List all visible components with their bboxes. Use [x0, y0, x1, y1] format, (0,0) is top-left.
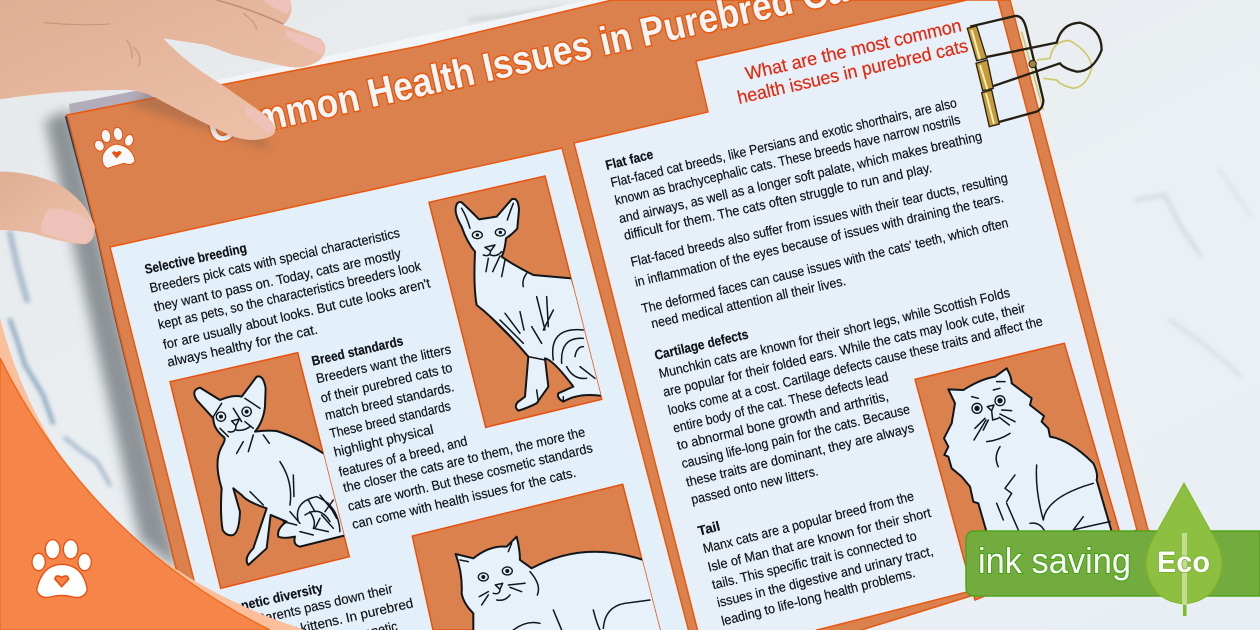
text block: breed standards: [310, 333, 594, 532]
image: hairless cat sitting with raised paw: [170, 353, 349, 588]
page edge: [66, 116, 178, 574]
text block: breed standards: features of a breed, and: [337, 433, 469, 480]
text block: selective breeding: they want to pass on. Today, cats are mostly: [152, 246, 403, 315]
text block: genetic diversity: Genetic diversity: [223, 580, 325, 617]
banner bar: [966, 531, 1260, 596]
icon: leaf: [1146, 483, 1222, 616]
text block: tail: Tail: [696, 518, 722, 539]
image: hairless cat in profile: [429, 176, 607, 427]
text block: tail: issues in the digestive and urinary tract,: [715, 543, 935, 610]
stacked paper edges: [69, 0, 625, 118]
subtitle question: What are the most common: [743, 14, 963, 84]
text block: breed standards: highlight physical: [332, 422, 435, 460]
icon: leaf: Eco: [1157, 546, 1210, 579]
page shadow: [45, 110, 180, 572]
binder clip: [967, 16, 1102, 127]
text block: flat face: [604, 95, 1010, 331]
text block: selective breeding: for are usually about looks. But cute looks aren't: [162, 276, 432, 352]
text block: flat face: difficult for them. The cats often struggle to run and play.: [622, 160, 933, 243]
text block: tail: [696, 488, 935, 629]
text block: breed standards: the closer the cats are to them, the more the: [342, 424, 587, 495]
text block: flat face: Flat-faced cat breeds, like Persians and exotic shorthairs, are also: [609, 95, 958, 190]
text block: breed standards: of their purebred cats to: [319, 360, 454, 406]
text block: breed standards: These breed standards: [328, 398, 452, 441]
text block: cartilage defects: these traits are dominant, they are always: [684, 420, 916, 490]
text block: selective breeding: always healthy for the cat.: [166, 322, 319, 370]
corner curve: [0, 358, 270, 630]
text block: cartilage defects: entire body of the cat. These defects lead: [671, 369, 890, 436]
text block: flat face: in inflammation of the eyes because of issues with draining the tears.: [633, 190, 1005, 290]
text block: breed standards: cats are worth. But these cosmetic standards: [346, 440, 594, 514]
subtitle question: health issues in purebred cats: [735, 35, 970, 108]
image: fluffy flat-faced cat: [915, 343, 1122, 600]
text block: flat face: known as brachycephalic cats. These breeds have narrow nostrils: [613, 112, 962, 208]
text block: selective breeding: Breeders pick cats with special characteristics: [148, 225, 401, 296]
text block: cartilage defects: are popular for their folded ears. While the cats may look cute, their: [662, 300, 1027, 400]
text block: cartilage defects: Munchkin cats are known for their short legs, while Scottish Folds: [657, 285, 1012, 381]
panel: right: [574, 0, 1137, 630]
text block: cartilage defects: looks come at a cost. Cartilage defects cause these traits and affect the: [666, 314, 1044, 418]
text block: flat face: need medical attention all their lives.: [650, 273, 847, 331]
hand: fingers: [0, 0, 325, 244]
text block: cartilage defects: [653, 285, 1044, 507]
text block: flat face: and airways, as well as a longer soft palate, which makes breathing: [617, 129, 983, 226]
text block: tail: Isle of Man that are known for their short: [706, 505, 933, 575]
text block: tail: tails. This specific trait is connected to: [710, 528, 918, 592]
text block: selective breeding: Selective breeding: [143, 240, 248, 277]
text block: selective breeding: [143, 225, 432, 370]
icon: corner paw: [32, 540, 91, 597]
image: white short-haired cat lying down: [412, 484, 667, 630]
text block: breed standards: can come with health issues for the cats.: [351, 465, 577, 532]
text block: cartilage defects: Cartilage defects: [653, 327, 750, 363]
ink saving banner: [966, 483, 1260, 616]
text block: tail: leading to life-long health problems.: [720, 565, 917, 629]
text block: flat face: Flat face: [604, 147, 655, 173]
text block: breed standards: Breeders want the litters: [315, 342, 453, 386]
text block: cartilage defects: passed onto new litters.: [690, 463, 820, 507]
text block: breed standards: Breed standards: [310, 333, 405, 369]
text block: genetic diversity: Parents pass down their: [255, 581, 395, 627]
text block: cartilage defects: to abnormal bone growth and arthritis,: [676, 388, 890, 453]
text block: flat face: Flat-faced breeds also suffer from issues with their tear ducts, resulting: [629, 170, 1009, 270]
panel: left: [110, 148, 689, 630]
hand: shadow: [130, 90, 270, 150]
text block: selective breeding: kept as pets, so the characteristics breeders look: [157, 258, 423, 332]
text block: flat face: The deformed faces can cause issues with the cats' teeth, which often: [640, 215, 1010, 316]
decorative corner curve band: [0, 318, 305, 630]
banner label: ink saving: [978, 540, 1131, 581]
text block: breed standards: match breed standards.: [323, 379, 455, 423]
icon: page paw: [92, 127, 135, 168]
text block: cartilage defects: causing life-long pain for the cats. Because: [680, 401, 911, 471]
text block: tail: Manx cats are a popular breed from the: [701, 488, 915, 556]
